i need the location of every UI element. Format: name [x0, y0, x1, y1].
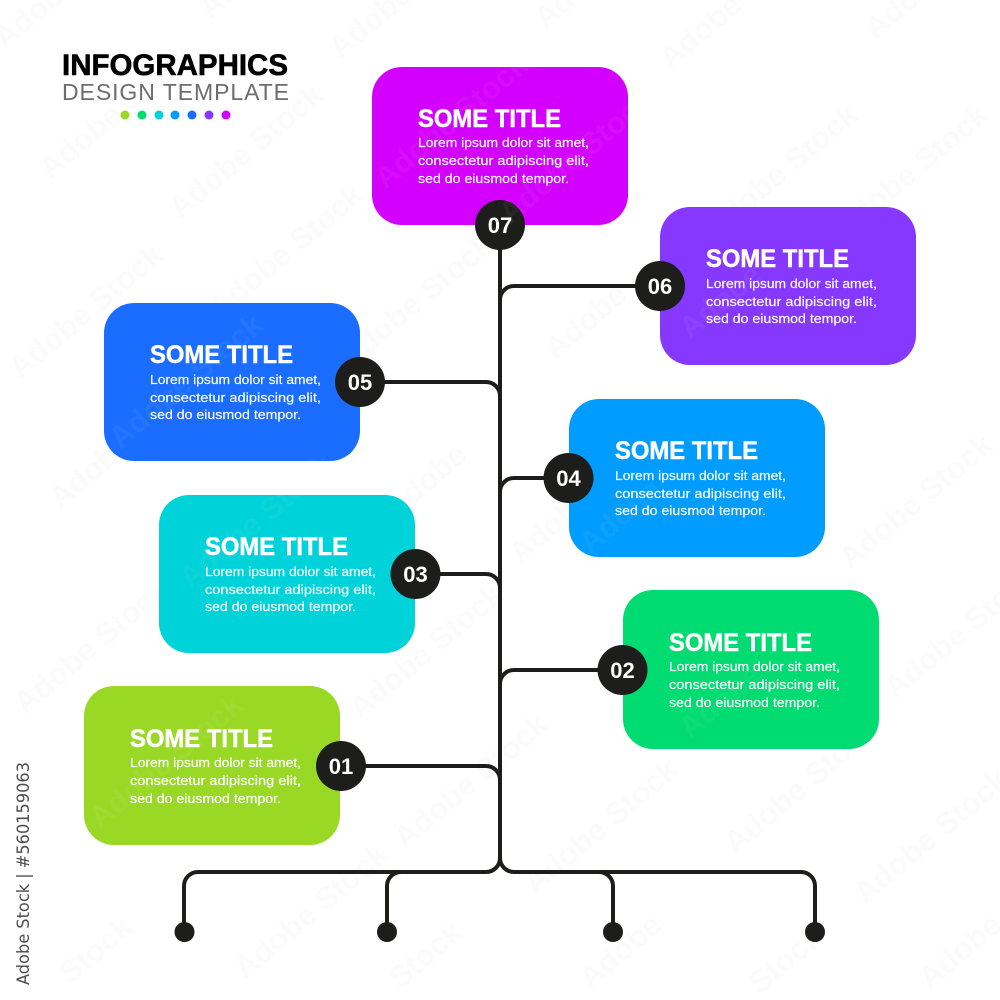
subheading: design template: DESIGN TEMPLATE: [62, 79, 289, 105]
card 02: [623, 590, 879, 749]
text: Adobe Stock: [827, 96, 995, 245]
card 05: SOME TITLE: [150, 341, 293, 369]
colour dots: [120, 110, 230, 120]
text: Adobe Stock: [162, 76, 330, 225]
badge 05: [335, 357, 385, 407]
card 04: SOME TITLE: [615, 437, 758, 465]
text: Adobe Stock: [387, 706, 555, 855]
card 01: sed do eiusmod tempor.: [130, 791, 281, 806]
text: Stock: [382, 914, 470, 995]
text: Adobe: [572, 472, 668, 560]
card 03: SOME TITLE: [205, 533, 348, 561]
text: Adobe Stock: [172, 446, 340, 595]
text: Adobe Stock: [367, 46, 535, 195]
badge 04: 04: [556, 466, 581, 491]
badge 02: [598, 645, 648, 695]
text: Adobe Stock: [32, 36, 200, 185]
card 05: sed do eiusmod tempor.: [150, 407, 301, 422]
text: Adobe Stock: [332, 226, 500, 375]
card 07: SOME TITLE: [418, 105, 561, 133]
card 03: sed do eiusmod tempor.: [205, 599, 356, 614]
badge 01: [316, 741, 366, 791]
card 02: consectetur adipiscing elit,: [669, 677, 840, 692]
badge 02: 02: [610, 658, 635, 683]
card 06: [660, 207, 916, 365]
card 04: Lorem ipsum dolor sit amet,: [615, 468, 786, 483]
badge 04: [544, 453, 594, 503]
card 06: sed do eiusmod tempor.: [706, 311, 857, 326]
card 02: sed do eiusmod tempor.: [669, 695, 820, 710]
text: Adobe Stock: [517, 751, 685, 900]
text: Stock: [52, 909, 140, 990]
card 04: sed do eiusmod tempor.: [615, 503, 766, 518]
card 06: consectetur adipiscing elit,: [706, 294, 877, 309]
card 04: consectetur adipiscing elit,: [615, 486, 786, 501]
tree connector lines: [184, 225, 815, 932]
card 03: consectetur adipiscing elit,: [205, 582, 376, 597]
card 07: consectetur adipiscing elit,: [418, 153, 589, 168]
text: Adobe Stock: [717, 711, 885, 860]
card 07: [372, 67, 628, 225]
card 02: SOME TITLE: [669, 629, 812, 657]
stock id label: Adobe Stock | #560159063: [14, 762, 34, 985]
text: Adobe: [42, 427, 138, 515]
card 01: SOME TITLE: [130, 725, 273, 753]
text: Adobe: [672, 657, 768, 745]
badge 01: 01: [329, 754, 353, 779]
heading: infographics: INFOGRAPHICS: [62, 49, 288, 82]
text: Adobe Stock: [2, 236, 170, 385]
card 07: sed do eiusmod tempor.: [418, 171, 569, 186]
card 01: Lorem ipsum dolor sit amet,: [130, 755, 301, 770]
badge 07: [475, 200, 525, 250]
card 01: [84, 686, 340, 845]
card 05: consectetur adipiscing elit,: [150, 390, 321, 405]
card 06: Lorem ipsum dolor sit amet,: [706, 276, 877, 291]
text: Adobe: [502, 482, 598, 570]
title: [62, 49, 289, 120]
card 04: [569, 399, 825, 557]
text: Adobe Stock: [102, 306, 270, 455]
badge 05: 05: [348, 370, 372, 395]
badge 03: [390, 549, 440, 599]
card 07: Lorem ipsum dolor sit amet,: [418, 135, 589, 150]
badge 07: 07: [488, 213, 512, 238]
badge 06: 06: [648, 274, 672, 299]
end nodes: [174, 922, 825, 942]
text: Stock: [742, 919, 830, 1000]
text: Adobe Stock: [697, 96, 865, 245]
card 03: [159, 495, 415, 653]
text: Adobe: [537, 277, 633, 365]
text: Adobe Stock: [342, 576, 510, 725]
badge 03: 03: [403, 562, 428, 587]
card 05: Lorem ipsum dolor sit amet,: [150, 372, 321, 387]
text: Adobe: [572, 907, 668, 995]
card 05: [104, 303, 360, 461]
text: Adobe Stock: [82, 686, 250, 835]
text: Adobe: [672, 257, 768, 345]
text: Adobe Stock: [202, 176, 370, 325]
text: Adobe Stock: [7, 571, 175, 720]
card 03: Lorem ipsum dolor sit amet,: [205, 564, 376, 579]
text: Adobe Stock: [832, 426, 1000, 575]
card 01: consectetur adipiscing elit,: [130, 773, 301, 788]
text: Adobe: [377, 437, 473, 525]
badge 06: [635, 261, 685, 311]
text: Adobe Stock: [492, 81, 660, 230]
text: Adobe Stock: [227, 836, 395, 985]
card 06: SOME TITLE: [706, 245, 849, 273]
card 02: Lorem ipsum dolor sit amet,: [669, 659, 840, 674]
